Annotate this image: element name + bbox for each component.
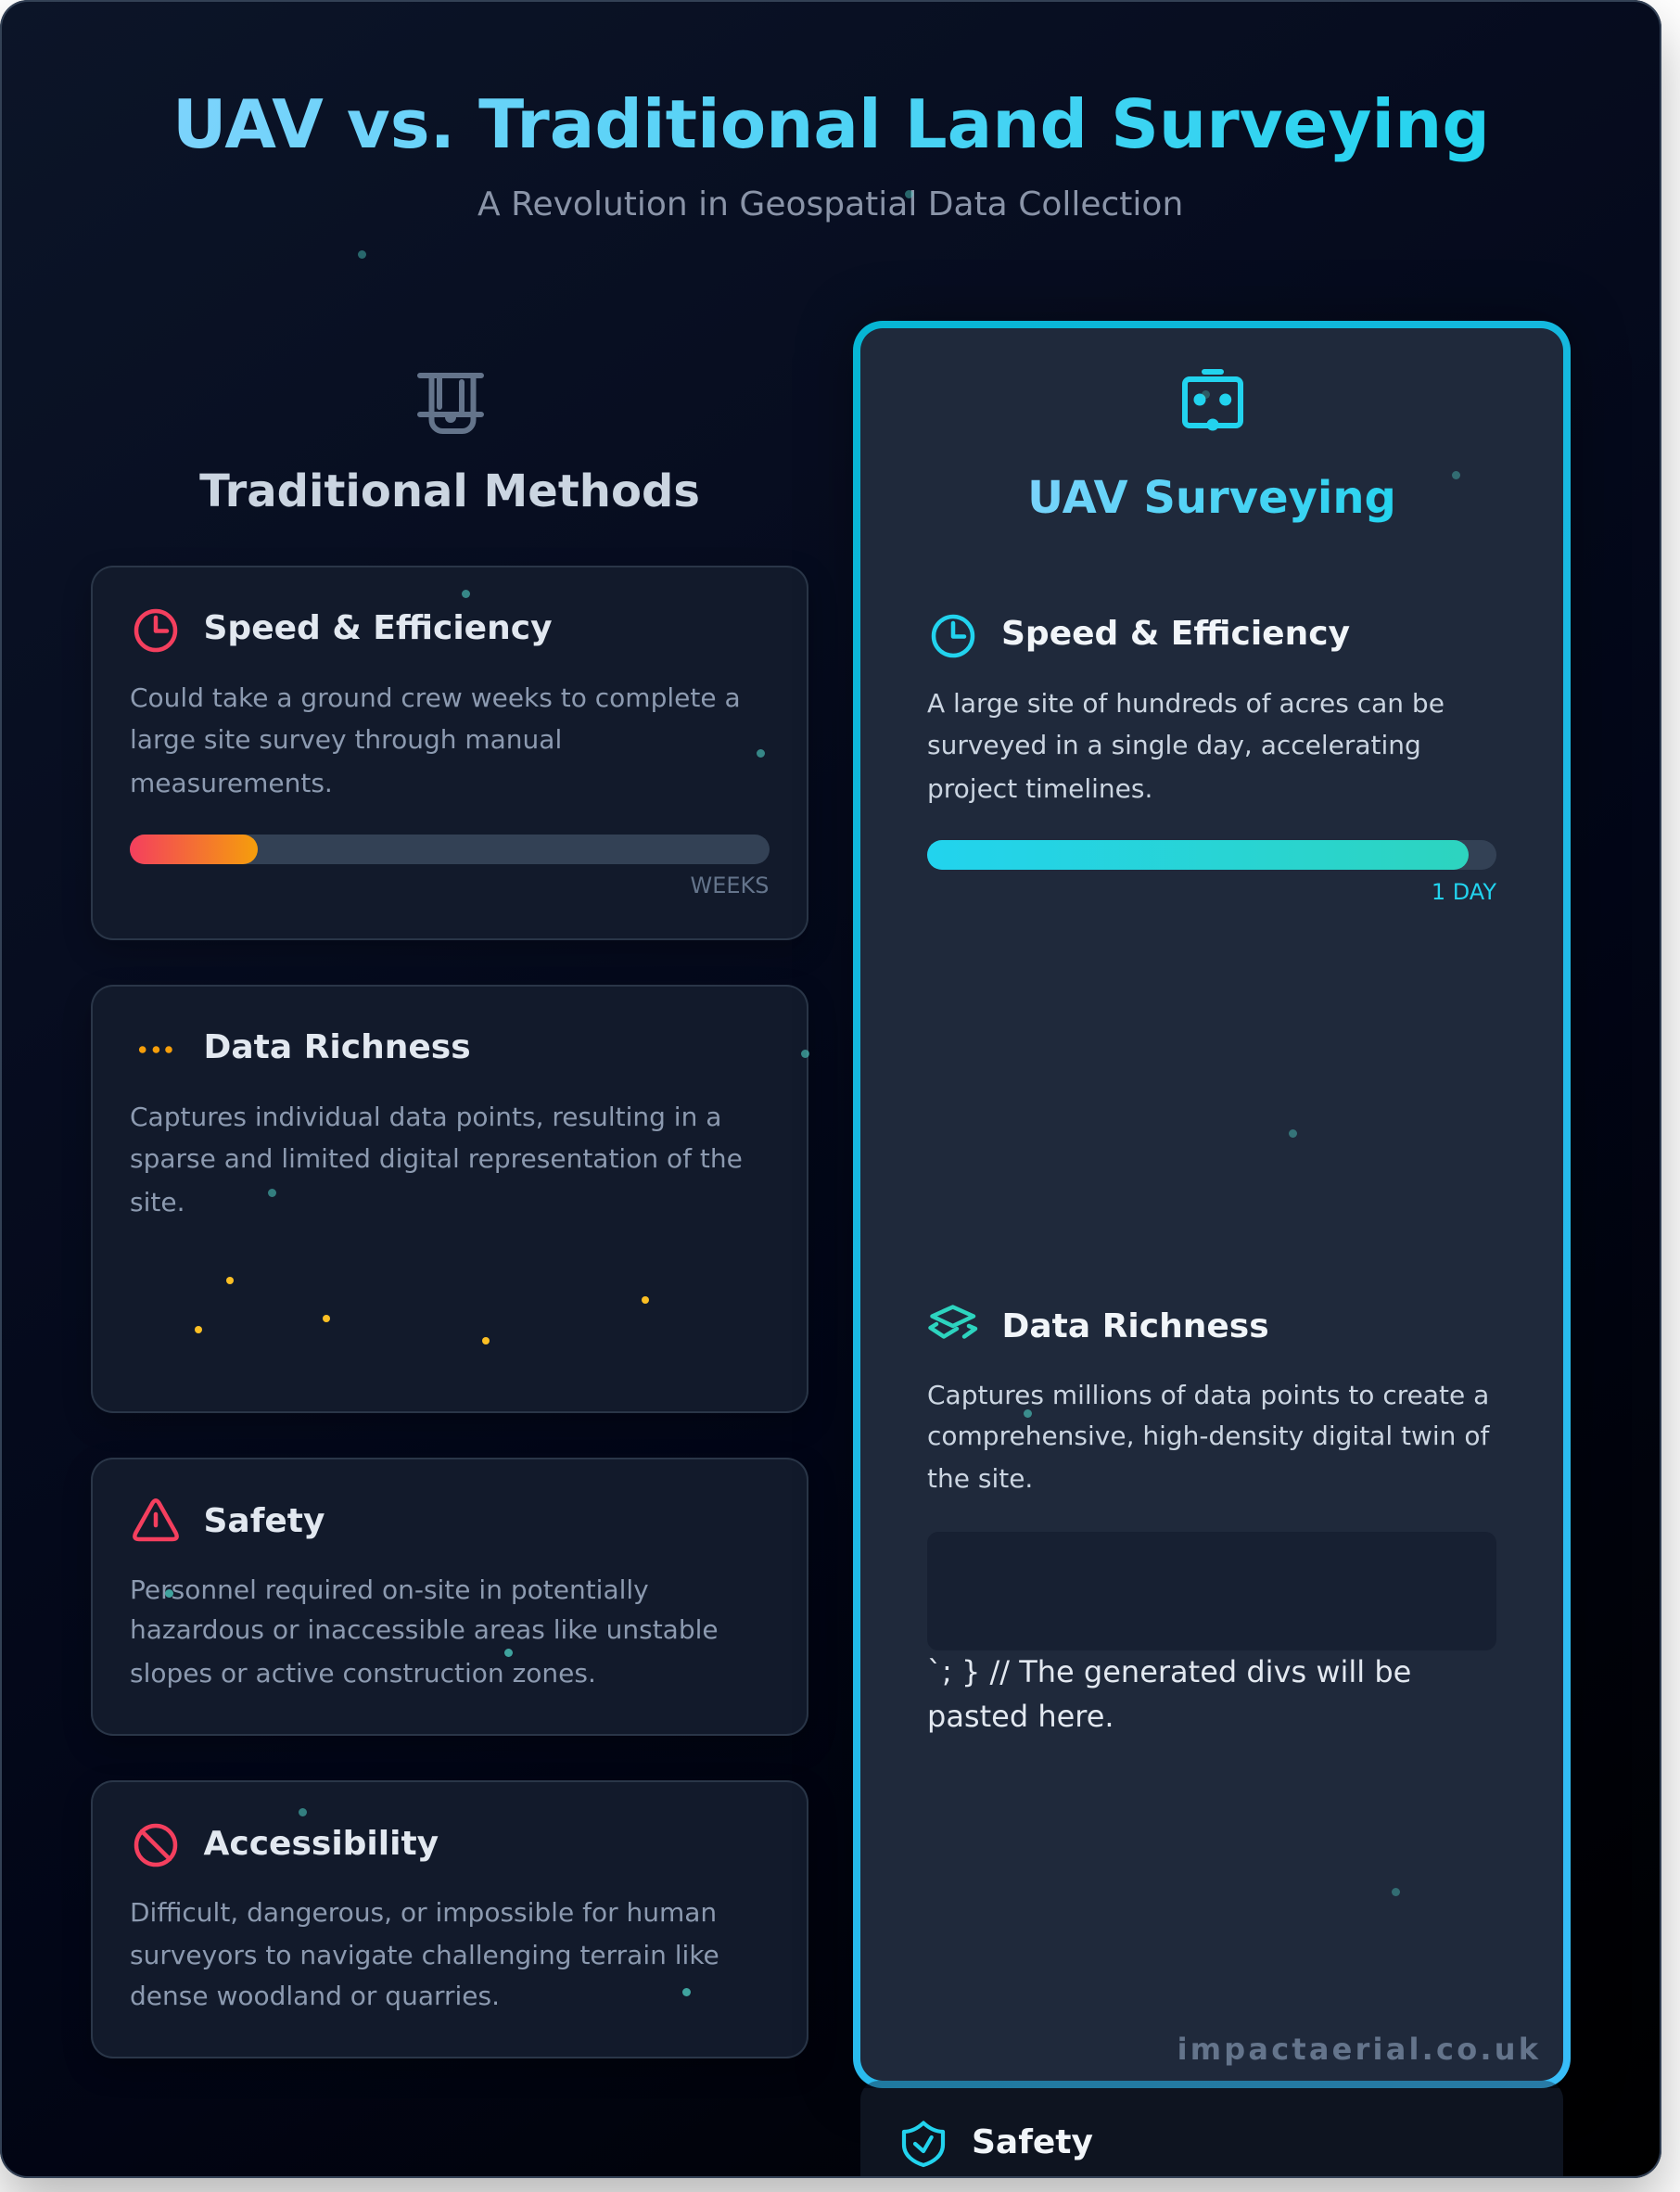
panel: traditional data richness xyxy=(91,985,808,1413)
watermark: impactaerial.co.uk xyxy=(1177,2032,1541,2067)
sparse data points xyxy=(195,1277,649,1345)
heading: speed and efficiency: Speed & Efficiency xyxy=(204,609,553,647)
description: uav speed: project timelines. xyxy=(927,773,1152,804)
heading: uav surveying: UAV Surveying xyxy=(1027,471,1396,523)
bar fill xyxy=(130,835,258,864)
description: uav data richness: the site. xyxy=(927,1463,1033,1494)
heading: data richness: Data Richness xyxy=(204,1028,471,1066)
description: uav speed: surveyed in a single day, accelerating xyxy=(927,730,1421,760)
description: uav speed: A large site of hundreds of acres can be xyxy=(927,688,1445,719)
description: sparse and limited digital representation of the xyxy=(130,1143,743,1174)
description: dense woodland or quarries. xyxy=(130,1981,500,2011)
description: Difficult, dangerous, or impossible for human xyxy=(130,1897,717,1928)
icon: shield with check xyxy=(901,2121,946,2168)
icon: three dots xyxy=(139,1046,172,1053)
column header: traditional methods xyxy=(199,373,700,517)
icon: layers xyxy=(928,1305,977,1339)
description: site. xyxy=(130,1187,185,1217)
heading: uav safety: Safety xyxy=(972,2123,1093,2161)
panel: traditional speed and efficiency xyxy=(91,566,808,940)
description xyxy=(130,1102,743,1217)
panel: uav safety, clipped at the page edge xyxy=(860,2081,1563,2192)
panel: traditional accessibility xyxy=(91,1780,808,2058)
description: uav data richness xyxy=(927,1380,1490,1494)
bar fill xyxy=(927,840,1469,870)
heading: traditional methods: Traditional Methods xyxy=(199,465,700,517)
description xyxy=(130,1574,719,1689)
description: uav data richness: Captures millions of data points to create a xyxy=(927,1380,1489,1410)
bar label: weeks: WEEKS xyxy=(690,873,770,898)
description: uav data richness: comprehensive, high-density digital twin of xyxy=(927,1421,1489,1451)
icon: warning triangle xyxy=(133,1498,179,1541)
description: large site survey through manual xyxy=(130,724,562,755)
empty dense point cloud box xyxy=(927,1532,1496,1650)
description: slopes or active construction zones. xyxy=(130,1658,596,1689)
description: hazardous or inaccessible areas like unstable xyxy=(130,1614,719,1645)
stray code text: pasted here. xyxy=(927,1699,1114,1734)
description: surveyors to navigate challenging terrain like xyxy=(130,1940,719,1970)
icon: uav drone xyxy=(1182,369,1243,430)
description: uav speed xyxy=(927,688,1445,804)
description: Personnel required on-site in potentially xyxy=(130,1574,649,1605)
stray code text xyxy=(927,1654,1411,1734)
description xyxy=(130,682,741,798)
heading: safety: Safety xyxy=(204,1502,325,1540)
heading: uav speed and efficiency: Speed & Efficiency xyxy=(1001,615,1350,653)
icon: red clock xyxy=(134,608,178,653)
description xyxy=(130,1897,719,2011)
title: UAV vs. Traditional Land Surveying xyxy=(172,85,1490,163)
description: Captures individual data points, resulting in a xyxy=(130,1102,721,1132)
bar label: one day: 1 DAY xyxy=(1432,879,1496,905)
description: measurements. xyxy=(130,768,333,798)
icon: no entry xyxy=(134,1823,178,1867)
icon: cyan clock xyxy=(931,614,975,658)
progress bar: one day xyxy=(927,840,1496,870)
subtitle: A Revolution in Geospatial Data Collection xyxy=(477,185,1183,223)
stray code text: `; } // The generated divs will be xyxy=(927,1654,1411,1689)
heading: accessibility: Accessibility xyxy=(204,1825,439,1863)
heading: uav data richness: Data Richness xyxy=(1001,1307,1269,1345)
panel: traditional safety xyxy=(91,1458,808,1736)
description: Could take a ground crew weeks to complete a xyxy=(130,682,741,713)
icon: surveying tripod xyxy=(417,373,484,434)
progress bar: weeks xyxy=(130,835,770,864)
panel: uav surveying xyxy=(853,321,1571,2088)
